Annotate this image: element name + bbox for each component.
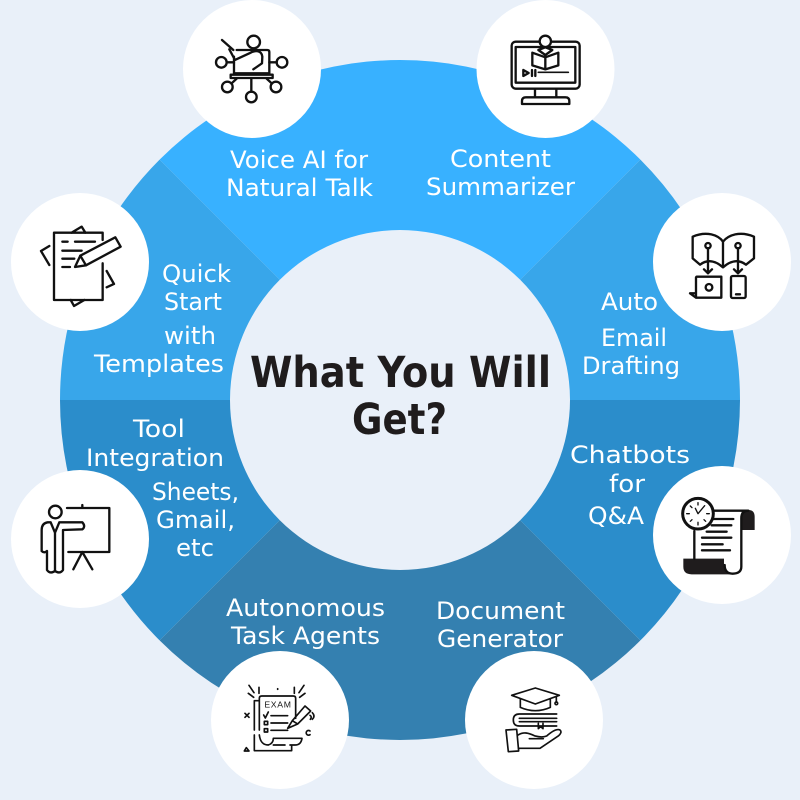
center title: What You Will xyxy=(250,348,551,398)
label: content summarizer: Summarizer xyxy=(426,173,575,201)
label: tool integration xyxy=(86,415,239,562)
label: content summarizer: Content xyxy=(450,145,551,173)
badge: quick start xyxy=(11,193,149,331)
label: autonomous task agents: Task Agents xyxy=(230,622,380,650)
label: quick start: Start xyxy=(164,288,222,316)
label: autonomous task agents: Autonomous xyxy=(226,594,385,622)
label: quick start: Quick xyxy=(162,260,231,288)
label: voice AI xyxy=(226,146,373,202)
icon: monitor with book xyxy=(512,36,580,104)
label: autonomous task agents xyxy=(226,594,385,650)
label: auto email drafting: Email xyxy=(601,324,667,352)
segment: lower left xyxy=(60,400,280,640)
center title xyxy=(250,348,551,445)
label: voice AI: Natural Talk xyxy=(226,174,373,202)
label: document generator: Generator xyxy=(437,625,563,653)
label: quick start xyxy=(93,260,231,378)
segment: bottom xyxy=(160,520,640,740)
label: content summarizer xyxy=(426,145,575,201)
icon: scroll with clock xyxy=(683,498,755,574)
badge: autonomous task agents xyxy=(211,651,349,789)
icon: presenter at board xyxy=(42,505,109,572)
icon: open book to devices xyxy=(690,234,754,298)
badge: tool integration xyxy=(11,470,149,608)
icon: exam paper and pencil: EXAM xyxy=(264,699,291,709)
label: tool integration: etc xyxy=(176,534,214,562)
label: tool integration: Integration xyxy=(86,444,224,472)
icon: presenter with network nodes xyxy=(216,36,287,102)
segment: upper left xyxy=(60,160,280,400)
label: tool integration: Gmail, xyxy=(156,506,235,534)
label: auto email drafting: Drafting xyxy=(582,352,680,380)
badge: voice AI xyxy=(183,0,321,138)
label: auto email drafting: Auto xyxy=(601,288,658,316)
label: chatbots: Q&A xyxy=(588,502,645,530)
label: document generator: Document xyxy=(436,597,565,625)
badge: auto email xyxy=(653,193,791,331)
label: quick start: Templates xyxy=(93,350,224,378)
icon: cap, book and hand xyxy=(506,688,561,752)
center title: Get? xyxy=(352,395,447,445)
label: voice AI: Voice AI for xyxy=(230,146,368,174)
label: quick start: with xyxy=(164,322,216,350)
label: document generator xyxy=(436,597,565,653)
segment: lower right xyxy=(520,400,740,640)
label: chatbots: for xyxy=(609,470,645,498)
label: tool integration: Tool xyxy=(132,415,185,443)
segment: upper right xyxy=(520,160,740,400)
label: chatbots: Chatbots xyxy=(570,441,690,469)
badge: chatbots xyxy=(653,466,791,604)
label: chatbots xyxy=(570,441,690,530)
label: tool integration: Sheets, xyxy=(152,478,239,506)
badge: content summarizer xyxy=(476,0,614,138)
badge: document generator xyxy=(465,651,603,789)
label: auto email drafting xyxy=(582,288,680,380)
ring of segments xyxy=(60,60,740,740)
icon: document and pencil xyxy=(41,227,121,306)
segment: top xyxy=(160,60,640,280)
